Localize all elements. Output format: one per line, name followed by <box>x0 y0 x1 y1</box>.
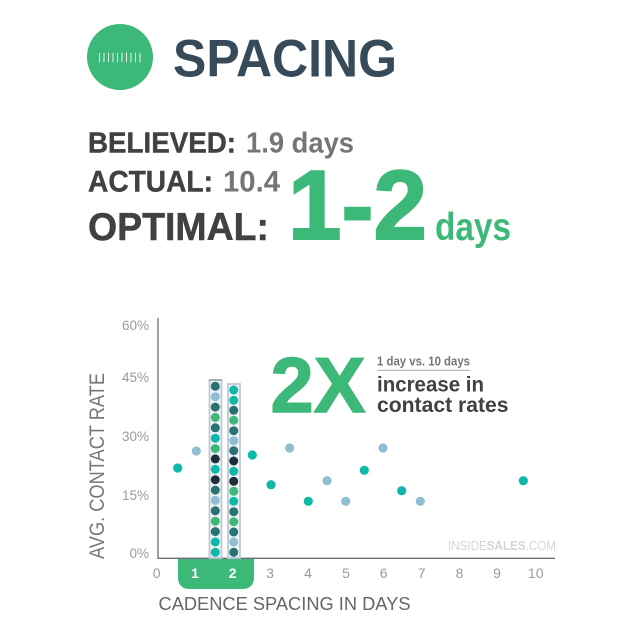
stat: actual: 10.4 <box>223 166 281 199</box>
callout text <box>377 354 508 417</box>
stat: believed: 1.9 days <box>246 127 354 159</box>
x axis labels <box>153 565 544 581</box>
x axis labels: 7 <box>418 565 426 581</box>
callout: 2X: 2X <box>270 341 366 429</box>
stat: believed <box>88 127 354 159</box>
title: SPACING <box>173 30 397 88</box>
watermark: INSIDESALES.COM <box>448 539 556 553</box>
y axis labels: 30% <box>122 429 149 444</box>
y axis labels: 0% <box>129 546 149 561</box>
x axis labels: 4 <box>304 565 312 581</box>
x axis labels: 2 <box>229 565 237 581</box>
x axis labels: 9 <box>493 565 501 581</box>
x axis labels: 5 <box>342 565 350 581</box>
y axis title: AVG. CONTACT RATE <box>86 373 109 559</box>
stat: optimal <box>88 150 511 260</box>
highlight tab: days 1 and 2 <box>178 559 254 589</box>
stat: actual <box>88 166 281 199</box>
x axis labels: 0 <box>153 565 161 581</box>
callout text: increase in <box>377 374 484 397</box>
stat: optimal: OPTIMAL: <box>88 206 269 249</box>
y axis labels: 45% <box>122 370 149 385</box>
stat: optimal: days <box>435 206 511 249</box>
chart axes <box>158 318 555 558</box>
column: day 1 dots <box>209 380 222 558</box>
x axis labels: 3 <box>266 565 274 581</box>
icon: spacing circle <box>87 24 153 90</box>
y axis labels <box>122 318 149 561</box>
y axis labels: 60% <box>122 318 149 333</box>
callout text: 1 day vs. 10 days <box>377 354 470 369</box>
stat: actual: ACTUAL: <box>88 166 213 199</box>
stat: believed: BELIEVED: <box>88 127 236 159</box>
x axis title: CADENCE SPACING IN DAYS <box>158 593 410 614</box>
x axis labels: 6 <box>380 565 388 581</box>
column: day 2 dots <box>228 384 240 558</box>
scatter points <box>173 443 528 506</box>
x axis labels: 1 <box>191 565 199 581</box>
x axis labels: 8 <box>456 565 464 581</box>
x axis labels: 10 <box>528 565 544 581</box>
callout text: contact rates <box>377 394 508 417</box>
y axis labels: 15% <box>122 488 149 503</box>
stat: optimal: 1-2 <box>288 150 427 260</box>
